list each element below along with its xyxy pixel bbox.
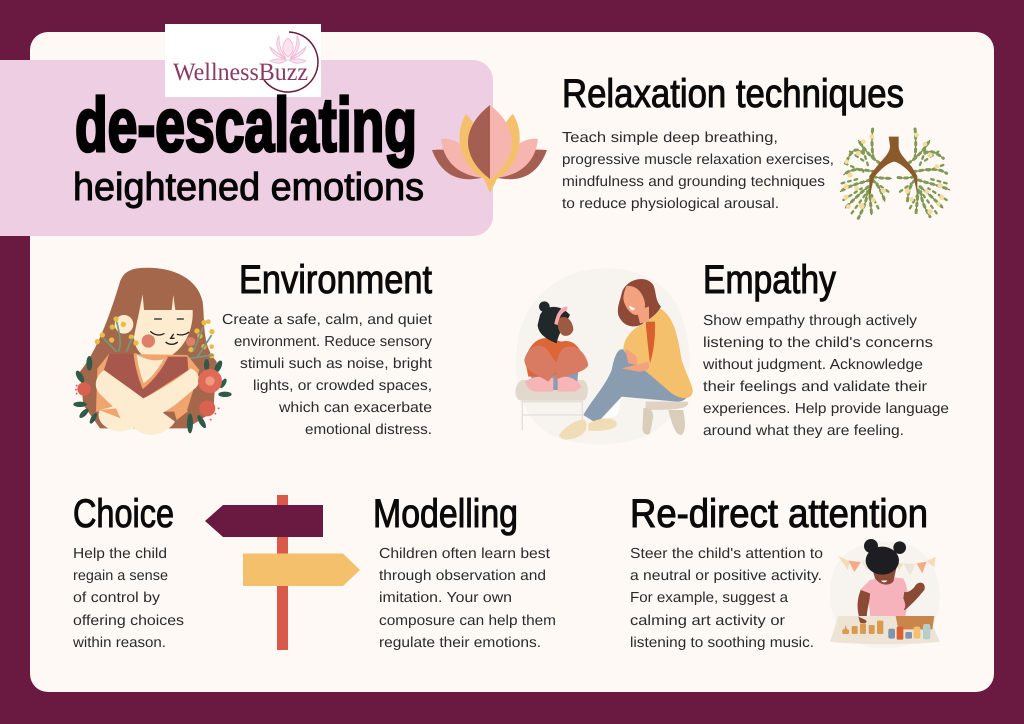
title banner — [0, 60, 493, 236]
text block: experiences. Help provide language — [703, 401, 949, 417]
illustration: adult listening to child — [515, 268, 693, 444]
text block: emotional distress. — [305, 422, 432, 438]
text block: Children often learn best — [379, 546, 550, 562]
panel: modelling — [373, 492, 556, 651]
text block: regain a sense — [73, 568, 168, 584]
heading: Relaxation techniques — [562, 72, 904, 116]
illustration: girl hugging herself — [73, 268, 232, 435]
text block: Help the child — [73, 546, 167, 562]
text block: composure can help them — [379, 613, 556, 629]
text block: a neutral or positive activity. — [630, 568, 822, 584]
text block: within reason. — [72, 635, 166, 651]
heading: Modelling — [373, 492, 518, 536]
logo: WellnessBuzz — [165, 24, 321, 97]
text block — [702, 313, 949, 439]
text block — [379, 546, 556, 651]
text block: around what they are feeling. — [703, 423, 904, 439]
text block — [630, 546, 823, 651]
panel: re-direct attention — [630, 492, 940, 651]
text block: regulate their emotions. — [379, 635, 541, 651]
text block: Steer the child's attention to — [630, 546, 823, 562]
text block — [562, 130, 834, 212]
text block: lights, or crowded spaces, — [253, 378, 432, 394]
heading: Re-direct attention — [630, 492, 928, 536]
text block — [72, 546, 184, 651]
panel: relaxation techniques — [562, 72, 950, 218]
title — [73, 83, 424, 209]
title: de-escalating — [75, 83, 417, 168]
text block: Teach simple deep breathing, — [562, 130, 778, 146]
icon: signpost — [205, 495, 360, 650]
icon: lotus — [432, 105, 547, 193]
panel: empathy — [515, 258, 949, 444]
title: heightened emotions — [73, 166, 424, 209]
text block: imitation. Your own — [379, 590, 512, 606]
heading: Choice — [73, 492, 174, 536]
text block: offering choices — [73, 613, 184, 629]
text block: without judgment. Acknowledge — [702, 357, 923, 373]
icon: lungs with leaves — [840, 128, 950, 218]
text block: through observation and — [379, 568, 546, 584]
text block: their feelings and validate their — [703, 379, 927, 395]
text block: mindfulness and grounding techniques — [562, 174, 825, 190]
text block — [222, 312, 433, 438]
text block: listening to soothing music. — [630, 635, 814, 651]
illustration: child playing with toys — [830, 539, 940, 648]
heading: Empathy — [703, 258, 836, 302]
text block: to reduce physiological arousal. — [562, 196, 779, 212]
logo: WellnessBuzz: WellnessBuzz — [173, 59, 308, 86]
text block: calming art activity or — [630, 613, 785, 629]
text block: For example, suggest a — [630, 590, 789, 606]
text block: stimuli such as noise, bright — [240, 356, 432, 372]
text block: which can exacerbate — [278, 400, 432, 416]
text block: Show empathy through actively — [703, 313, 918, 329]
heading: Environment — [239, 258, 432, 302]
panel: environment — [73, 258, 433, 438]
text block: progressive muscle relaxation exercises, — [562, 152, 834, 168]
text block: environment. Reduce sensory — [234, 334, 433, 350]
panel: choice — [72, 492, 184, 651]
text block: listening to the child's concerns — [703, 335, 933, 351]
text block: Create a safe, calm, and quiet — [222, 312, 432, 328]
text block: of control by — [73, 590, 161, 606]
